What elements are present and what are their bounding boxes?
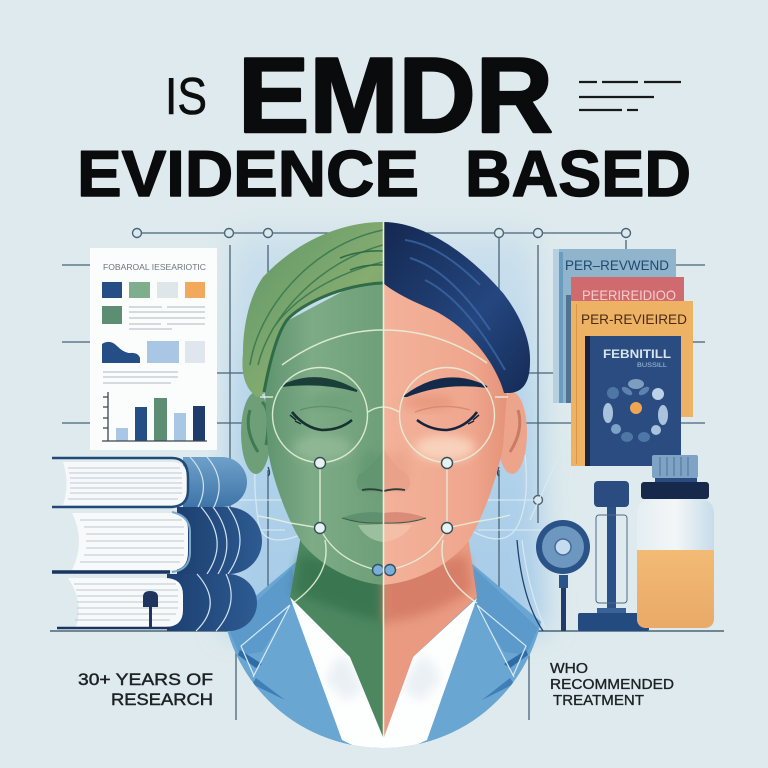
icon: text-lines mark xyxy=(579,82,681,110)
facial mapping nodes xyxy=(314,458,452,576)
caption: WHO recommended treatment: TREATMENT xyxy=(553,692,644,709)
caption: WHO recommended treatment: RECOMMENDED xyxy=(550,676,674,693)
light anatomical lines xyxy=(230,455,570,628)
eyebrows xyxy=(282,378,487,396)
icon: stethoscope xyxy=(517,520,590,631)
lips xyxy=(342,512,426,542)
jacket and shirt xyxy=(228,562,541,748)
hair: navy half xyxy=(383,222,530,393)
journal: navy: FEBNITILL xyxy=(603,347,671,361)
journal: red: PEERIREIDIOO xyxy=(582,287,676,303)
journal: red xyxy=(566,277,684,403)
facial mapping lines xyxy=(258,330,510,603)
icon: lab stand xyxy=(578,481,649,631)
document colour swatches xyxy=(102,282,205,363)
caption: WHO recommended treatment xyxy=(550,660,674,709)
hair: green half xyxy=(242,222,383,397)
book: middle xyxy=(72,507,262,574)
journal: navy: BUSSILL xyxy=(637,363,668,369)
caption: 30+ years of research: 30+ YEARS OF xyxy=(78,670,213,689)
central figure xyxy=(215,222,551,760)
panel: research document xyxy=(90,248,217,450)
title word: IS: IS xyxy=(165,68,207,126)
caption: 30+ years of research xyxy=(78,670,213,709)
face shading xyxy=(292,394,475,490)
document text lines xyxy=(103,307,205,383)
book: top xyxy=(52,457,247,507)
caption: WHO recommended treatment: WHO xyxy=(550,660,588,677)
infographic canvas xyxy=(50,57,724,748)
connector grid xyxy=(50,233,724,720)
blue backdrop behind head xyxy=(225,232,545,631)
book: bottom xyxy=(52,572,257,631)
icon: bottle xyxy=(637,455,714,628)
shirt collar xyxy=(290,597,477,760)
title line: EVIDENCE: EVIDENCE xyxy=(77,137,419,210)
centre divider xyxy=(382,222,384,737)
nose xyxy=(357,450,410,492)
journal: blue: PER–REVWEND xyxy=(565,257,669,273)
panel: peer-reviewed journals xyxy=(553,249,693,466)
title word: EMDR: EMDR xyxy=(238,35,553,155)
bar chart xyxy=(102,392,207,441)
ears xyxy=(241,392,527,476)
document heading: FOBAROAL IESEARIOTIC xyxy=(103,262,206,272)
face: salmon half xyxy=(383,270,507,585)
journal: orange: PER-REVIEIRED xyxy=(581,311,687,327)
icon: circular dots xyxy=(603,379,668,442)
journal: navy xyxy=(585,336,681,466)
title xyxy=(77,35,691,210)
caption: 30+ years of research: RESEARCH xyxy=(111,690,213,709)
connector nodes xyxy=(132,228,630,504)
closed eyes xyxy=(290,406,479,430)
neck xyxy=(290,530,477,737)
journal: blue xyxy=(553,249,676,403)
journal: orange xyxy=(571,301,693,466)
title line: BASED: BASED xyxy=(465,137,691,210)
face: green half xyxy=(265,270,383,585)
stack of books xyxy=(52,457,262,631)
icon: bookmark xyxy=(143,591,158,627)
